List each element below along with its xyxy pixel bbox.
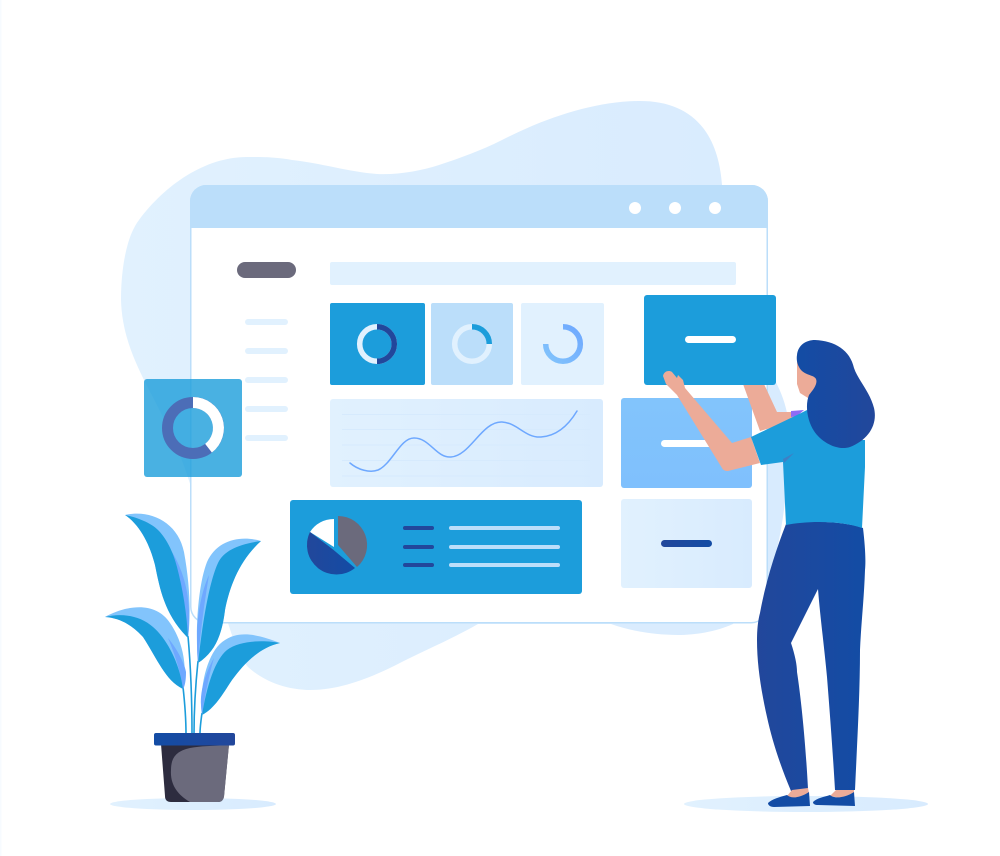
pie chart card: [290, 500, 582, 594]
donut card 3: [521, 303, 604, 385]
person ground shadow: [684, 796, 928, 812]
shoes and feet: [768, 788, 855, 807]
window title bar: [190, 185, 768, 228]
top search bar: [330, 262, 736, 285]
face: [797, 360, 818, 398]
front arm: [663, 371, 760, 471]
hair: [797, 340, 875, 448]
pie chart: [307, 516, 367, 575]
stems: [183, 636, 202, 734]
plant: [105, 514, 280, 802]
leaf lower left: [105, 607, 186, 689]
sleeve shadow: [783, 453, 794, 463]
line chart card: [330, 399, 603, 487]
sidebar menu items: [245, 319, 288, 441]
middle right card: [621, 398, 752, 488]
legend dashes: [403, 526, 434, 567]
leaf lower right: [201, 634, 280, 715]
background blob: [121, 101, 789, 690]
lower right card: [621, 499, 752, 588]
window control dots: [629, 202, 721, 214]
plant ground shadow: [110, 798, 276, 810]
pot rim: [154, 733, 235, 746]
leaf top left: [125, 514, 190, 638]
floating donut card: [144, 379, 242, 477]
woman: [644, 295, 875, 807]
pot highlight: [171, 745, 229, 802]
trend line: [350, 411, 577, 471]
browser window: [190, 185, 768, 623]
shirt: [751, 410, 865, 528]
upper right card held by woman: [644, 295, 776, 385]
back arm: [743, 384, 798, 431]
donut card 2: [431, 303, 513, 385]
donut card 1: [330, 303, 425, 385]
sidebar logo pill: [237, 262, 296, 278]
trousers: [757, 522, 865, 791]
legend lines: [449, 526, 560, 567]
leaf top right: [197, 539, 261, 663]
purple accent: [791, 410, 804, 417]
pot body: [161, 744, 229, 802]
